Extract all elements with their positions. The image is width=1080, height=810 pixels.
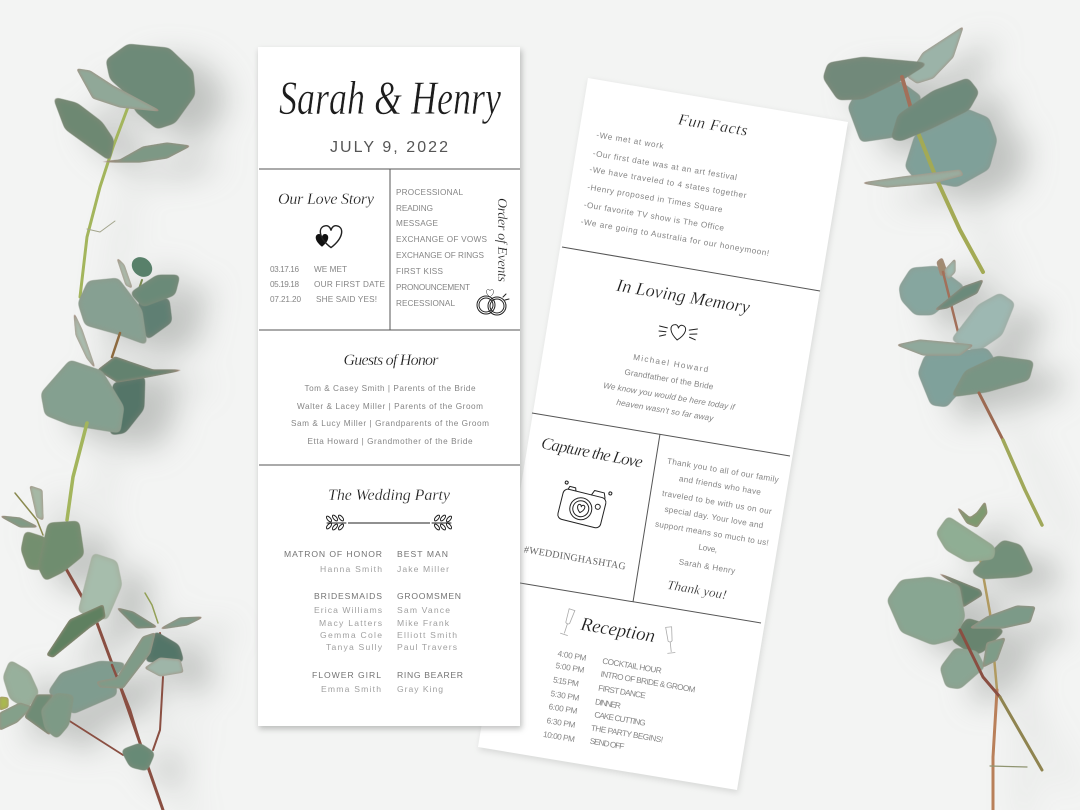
- guests list: Walter & Lacey Miller | Parents of the Groom: [297, 402, 483, 411]
- reception events: DINNER: [594, 697, 622, 711]
- fun facts list: -We have traveled to 4 states together: [589, 165, 747, 200]
- fun facts list: -We are going to Australia for our honeymoon!: [580, 217, 770, 258]
- memorial text: Grandfather of the Bride: [624, 368, 714, 392]
- party: matron and best man: [284, 549, 449, 574]
- section: thank you note: support means so much to us!: [654, 519, 769, 548]
- section: the wedding party: [284, 487, 463, 694]
- section: order of events: [396, 188, 509, 315]
- party: matron and best man: BEST MAN: [397, 549, 448, 559]
- party: matron and best man: Jake Miller: [397, 564, 449, 574]
- reception events: CAKE CUTTING: [594, 710, 646, 728]
- section: our love story: [270, 191, 386, 304]
- title: couple names: Sarah & Henry: [279, 72, 502, 125]
- heading: reception: Reception: [578, 614, 657, 647]
- party: bridesmaids and groomsmen: Erica Williams: [314, 605, 382, 615]
- reception times: 5:30 PM: [550, 689, 580, 703]
- icon: wedding rings: [477, 289, 509, 315]
- branch: right middle: [897, 258, 1042, 525]
- order of events list: MESSAGE: [396, 219, 439, 228]
- party: bridesmaids and groomsmen: BRIDESMAIDS: [314, 591, 382, 601]
- order of events list: PRONOUNCEMENT: [396, 283, 470, 292]
- icon: two hearts: [316, 226, 342, 248]
- reception events: [589, 657, 696, 751]
- section: in loving memory: [603, 275, 751, 423]
- party: flower girl and ring bearer: Gray King: [397, 684, 443, 694]
- love story timeline: 07.21.20: [270, 295, 301, 304]
- fun facts list: -Our favorite TV show is The Office: [583, 200, 725, 233]
- memorial text: We know you would be here today if: [603, 381, 736, 412]
- reception events: FIRST DANCE: [598, 684, 647, 701]
- order of events list: PROCESSIONAL: [396, 188, 463, 197]
- love story timeline: [270, 265, 386, 304]
- reception times: 5:00 PM: [555, 661, 585, 675]
- reception times: 6:00 PM: [548, 702, 578, 716]
- party: bridesmaids and groomsmen: Tanya Sully: [326, 642, 383, 652]
- panel: front card: [258, 47, 520, 726]
- party: bridesmaids and groomsmen: Paul Travers: [397, 642, 457, 652]
- branch: right bottom: [887, 502, 1042, 810]
- reception events: INTRO OF BRIDE & GROOM: [600, 670, 696, 694]
- section: thank you note: Sarah & Henry: [678, 557, 737, 576]
- section: thank you note: Love,: [698, 542, 718, 555]
- signature: thank you: Thank you!: [666, 577, 728, 602]
- party: flower girl and ring bearer: Emma Smith: [321, 684, 381, 694]
- section: thank you note: traveled to be with us on our: [661, 489, 773, 516]
- divider lines front card: [259, 169, 520, 465]
- divider lines back card: [520, 247, 820, 623]
- reception events: SEND OFF: [589, 737, 625, 751]
- reception events: COCKTAIL HOUR: [602, 657, 662, 675]
- party: flower girl and ring bearer: RING BEARER: [397, 670, 463, 680]
- order of events list: FIRST KISS: [396, 267, 444, 276]
- order of events list: READING: [396, 204, 433, 213]
- heading: the wedding party: The Wedding Party: [328, 487, 451, 504]
- order of events list: RECESSIONAL: [396, 299, 455, 308]
- guests list: [291, 384, 489, 446]
- section: guests of honor: [291, 352, 489, 446]
- card shadow: front card: [259, 50, 522, 729]
- icon: camera with heart: [556, 481, 612, 530]
- section: thank you note: and friends who have: [678, 474, 762, 497]
- party: bridesmaids and groomsmen: Sam Vance: [397, 605, 450, 615]
- section: thank you note: special day. Your love and: [664, 505, 764, 530]
- party: flower girl and ring bearer: FLOWER GIRL: [312, 670, 381, 680]
- order of events list: [396, 188, 488, 308]
- party: matron and best man: Hanna Smith: [320, 564, 382, 574]
- fun facts list: -Our first date was at an art festival: [592, 149, 738, 182]
- reception times: [542, 649, 587, 744]
- memorial text: [603, 353, 736, 423]
- branch: left bottom: [0, 423, 203, 810]
- love story timeline: 05.19.18: [270, 280, 299, 289]
- heading: in loving memory: In Loving Memory: [614, 275, 751, 317]
- hashtag: #WEDDINGHASHTAG: [523, 544, 626, 572]
- love story timeline: 03.17.16: [270, 265, 299, 274]
- section: fun facts: [580, 111, 770, 258]
- fun facts list: [580, 130, 770, 258]
- icon: champagne glass right: [665, 627, 675, 653]
- reception times: 5:15 PM: [552, 675, 580, 689]
- card shadow: back card: [479, 80, 849, 793]
- reception times: 4:00 PM: [557, 649, 587, 663]
- party: bridesmaids and groomsmen: Gemma Cole: [320, 630, 382, 640]
- party: flower girl and ring bearer: [312, 670, 463, 694]
- heading: capture the love: Capture the Love: [540, 433, 645, 472]
- section: capture the love: [523, 433, 645, 572]
- wedding date: JULY 9, 2022: [330, 139, 448, 156]
- order of events list: EXCHANGE OF RINGS: [396, 251, 485, 260]
- section: thank you note: [654, 457, 780, 602]
- guests list: Tom & Casey Smith | Parents of the Bride: [304, 384, 476, 393]
- branch: right top: [823, 27, 997, 272]
- heading: our love story: Our Love Story: [278, 191, 375, 208]
- section: thank you note: Thank you to all of our family: [666, 457, 780, 485]
- heading: order of events vertical: Order of Events: [494, 198, 509, 283]
- branch: left top: [41, 44, 195, 435]
- reception times: 6:30 PM: [546, 716, 576, 730]
- icon: heart with rays: [658, 323, 698, 342]
- love story timeline: OUR FIRST DATE: [314, 280, 386, 289]
- order of events list: EXCHANGE OF VOWS: [396, 235, 488, 244]
- reception times: 10:00 PM: [542, 730, 576, 744]
- guests list: Etta Howard | Grandmother of the Bride: [308, 437, 473, 446]
- party: matron and best man: MATRON OF HONOR: [284, 549, 382, 559]
- party: bridesmaids and groomsmen: Elliott Smith: [397, 630, 457, 640]
- heading: guests of honor: Guests of Honor: [344, 352, 439, 369]
- party: bridesmaids and groomsmen: GROOMSMEN: [397, 591, 461, 601]
- love story timeline: WE MET: [314, 265, 347, 274]
- party: bridesmaids and groomsmen: [314, 591, 461, 652]
- icon: champagne glass left: [560, 608, 576, 636]
- panel: back card: [478, 78, 848, 790]
- guests list: Sam & Lucy Miller | Grandparents of the Groom: [291, 419, 489, 428]
- heading: fun facts: Fun Facts: [676, 111, 749, 140]
- love story timeline: SHE SAID YES!: [316, 295, 377, 304]
- ornament: laurel divider: [326, 514, 452, 531]
- memorial text: heaven wasn't so far away: [616, 398, 715, 423]
- reception events: THE PARTY BEGINS!: [590, 723, 664, 745]
- fun facts list: -We met at work: [596, 130, 665, 151]
- party: bridesmaids and groomsmen: Macy Latters: [319, 618, 382, 628]
- party: bridesmaids and groomsmen: Mike Frank: [397, 618, 450, 628]
- fun facts list: -Henry proposed in Times Square: [587, 183, 724, 214]
- section: reception: [542, 608, 696, 751]
- memorial text: Michael Howard: [633, 353, 709, 374]
